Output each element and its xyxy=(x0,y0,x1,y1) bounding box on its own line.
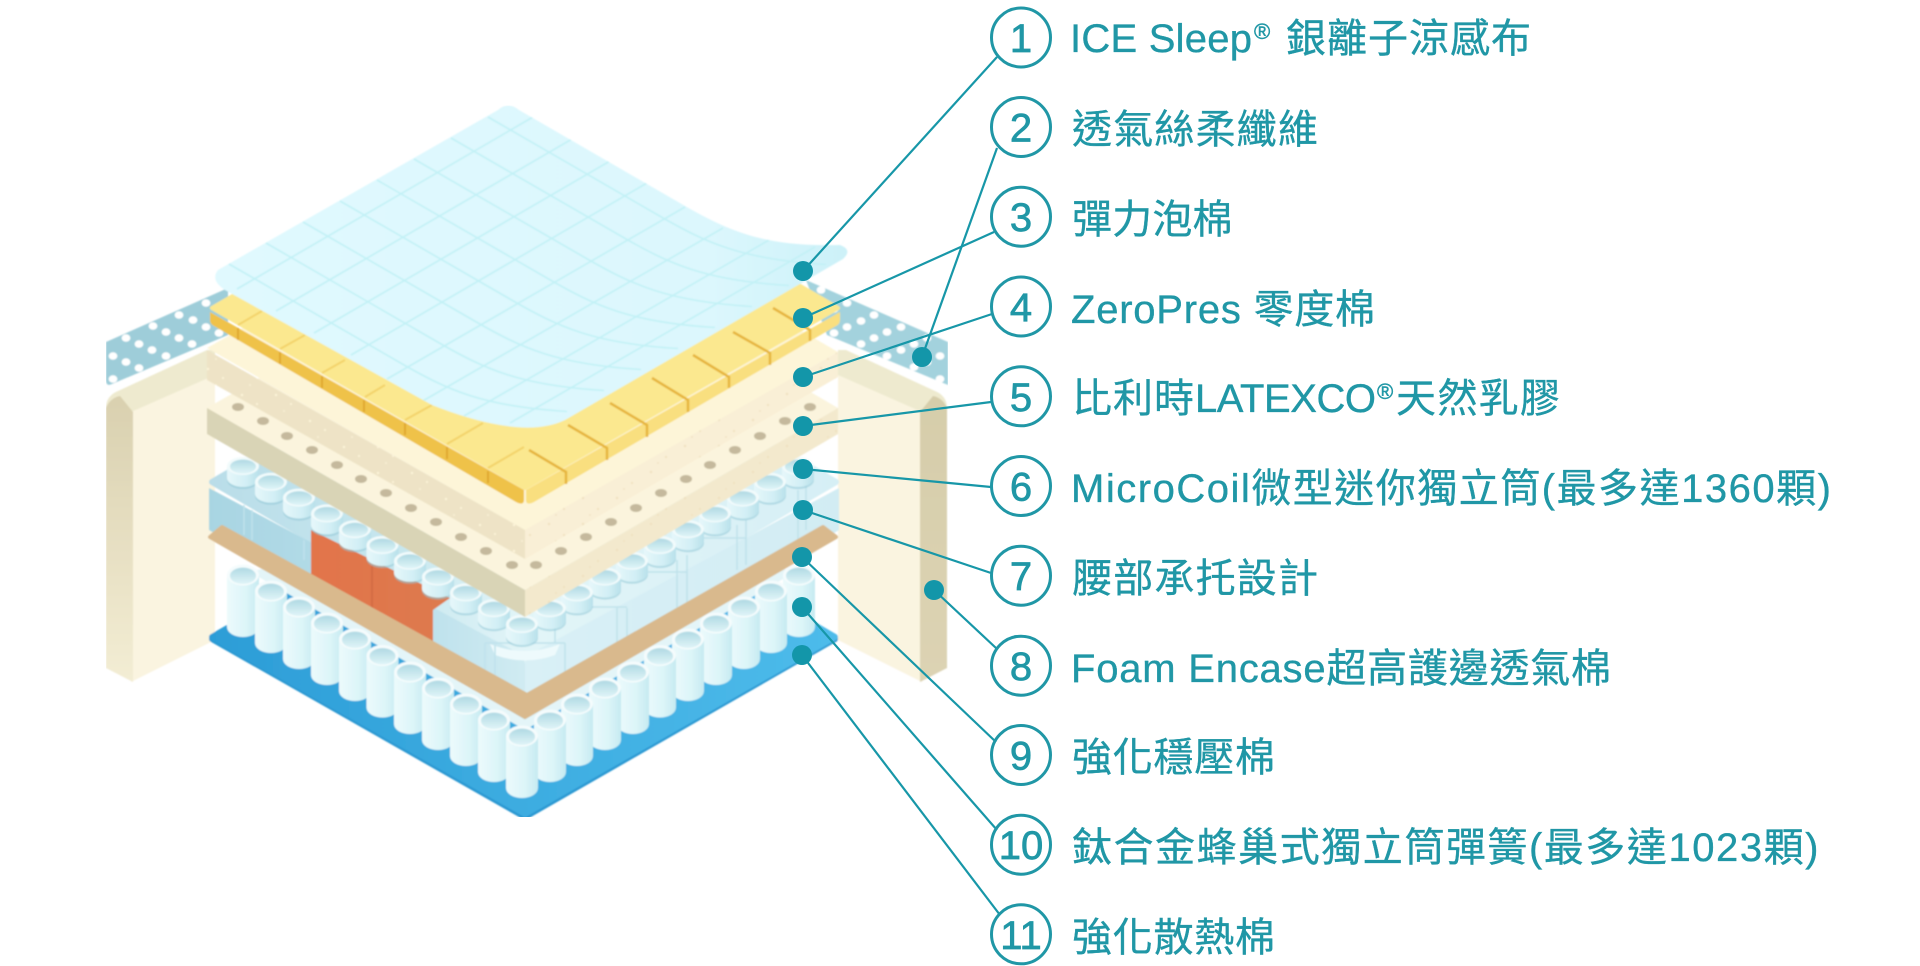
callout 8: Foam Encase超高護邊透氣棉 xyxy=(1071,647,1611,691)
panel: ZeroPres foam xyxy=(207,170,838,559)
callout 3: 彈力泡棉 xyxy=(1072,198,1232,242)
callout 1 xyxy=(992,8,1531,67)
callout 7: 腰部承托設計 xyxy=(1072,557,1318,601)
callout 5 xyxy=(992,367,1560,426)
callout 8: 8 xyxy=(1010,645,1032,689)
latex ventilation holes xyxy=(232,403,816,569)
callout 7 xyxy=(992,546,1318,605)
callout 1: 1 xyxy=(1010,17,1032,61)
panel: Belgian LATEXCO natural latex xyxy=(207,226,838,617)
panel: left perforated breathable fibre strip xyxy=(106,288,228,385)
callout 11 xyxy=(992,905,1275,964)
callout 1: ® xyxy=(1254,19,1270,44)
panel: right perforated breathable fibre strip xyxy=(806,280,948,385)
leader anchor dots xyxy=(792,261,944,665)
callout 9: 9 xyxy=(1010,734,1032,778)
panel: tan reinforced stabilising foam xyxy=(210,527,836,717)
callout 6: MicroCoil微型迷你獨立筒(最多達1360顆) xyxy=(1071,467,1831,511)
callout 9: 強化穩壓棉 xyxy=(1072,736,1275,780)
callout 6 xyxy=(992,456,1831,516)
callout 2: 透氣絲柔纖維 xyxy=(1072,108,1318,152)
panel: yellow resilience foam xyxy=(210,126,840,504)
callout 3: 3 xyxy=(1010,196,1032,240)
callout 2 xyxy=(992,98,1318,156)
leader lines xyxy=(802,57,1000,915)
callout 3 xyxy=(992,187,1232,246)
callout 6: 6 xyxy=(1010,466,1032,510)
panel: MicroCoil mini pocket coil caps xyxy=(227,457,814,647)
callout 8 xyxy=(992,636,1611,695)
panel: titanium alloy pocket coils xyxy=(227,500,815,798)
callout 5: 天然乳膠 xyxy=(1396,377,1560,421)
callout 11: 11 xyxy=(1000,914,1042,958)
callout 1: ICE Sleep xyxy=(1070,17,1252,61)
callout 7: 7 xyxy=(1010,555,1032,599)
callout 10 xyxy=(992,815,1818,874)
callout 5: 比利時 xyxy=(1072,377,1194,421)
callout 2: 2 xyxy=(1010,106,1032,150)
mattress illustration xyxy=(106,106,948,817)
callout 4: 4 xyxy=(1010,286,1032,330)
callout 5: ® xyxy=(1377,379,1393,404)
callout 4 xyxy=(992,277,1375,336)
callout 10: 10 xyxy=(999,824,1043,868)
lumbar support zone xyxy=(311,530,450,645)
callout 5: LATEXCO xyxy=(1195,377,1376,421)
panel: blue cooling foam base xyxy=(212,456,835,817)
panel: left Foam Encase wall xyxy=(106,350,215,682)
callout 5: 5 xyxy=(1010,376,1032,420)
panel: MicroCoil foam block with lumbar support xyxy=(209,300,839,720)
panel: ICE Sleep silver ion cooling fabric xyxy=(215,106,847,428)
callout 10: 鈦合金蜂巢式獨立筒彈簧(最多達1023顆) xyxy=(1072,826,1818,870)
panel: right Foam Encase wall xyxy=(838,350,947,682)
callout 4: ZeroPres 零度棉 xyxy=(1071,288,1375,332)
callout 9 xyxy=(992,726,1275,784)
callout 1: 銀離子涼感布 xyxy=(1286,17,1531,61)
callout 11: 強化散熱棉 xyxy=(1072,916,1275,960)
